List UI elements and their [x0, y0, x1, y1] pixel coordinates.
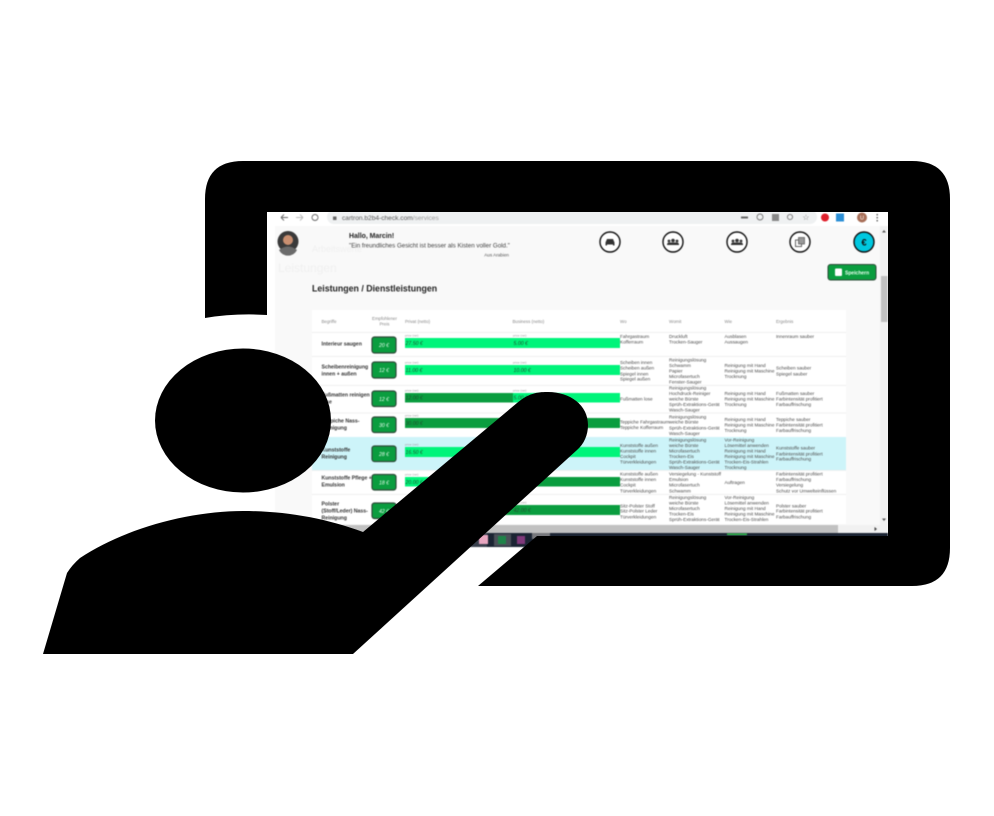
column: Wo: Türverkleidungen	[620, 459, 657, 464]
column: Womit: Wasch-Sauger	[669, 465, 700, 470]
table header: Wo	[620, 319, 627, 324]
row labels: (Stoff/Leder) Nass-	[322, 508, 368, 514]
column: Wie: Aussaugen	[724, 340, 748, 345]
price bars: price (net)	[405, 414, 419, 418]
browser toolbar: ☆	[802, 213, 810, 222]
column: Womit: Microfasertuch	[669, 483, 700, 488]
row labels	[322, 342, 372, 522]
browser toolbar: cartron.b2b4-check.com/services	[342, 215, 439, 222]
column: Wie: Ausblasen	[724, 334, 747, 339]
column: Wo: Teppiche Fahrgastraum	[620, 420, 669, 425]
price bars: 11.00 €	[406, 368, 424, 374]
column: Ergebnis: Farbintensität profitiert	[776, 509, 823, 514]
column: Wie: Lösemittel anwenden	[724, 443, 769, 448]
column: Wo: Fahrgastraum	[620, 334, 649, 339]
column: Ergebnis: Farbauffrischung	[776, 514, 811, 519]
avatar	[278, 231, 298, 256]
price bars: 20.00 €	[404, 480, 424, 486]
table header: Privat (netto)	[405, 319, 431, 324]
row labels: Reinigung	[322, 426, 347, 432]
column: Womit: Reinigungslösung	[669, 358, 707, 363]
column: Ergebnis: Fußmatten sauber	[776, 391, 815, 396]
price bars: 30.00 €	[406, 421, 424, 427]
column: Wie: Reinigung mit Maschine	[724, 396, 775, 401]
column: Wie: Vor-Reinigung	[724, 438, 755, 443]
row labels: Kunststoffe Pflege +	[322, 476, 372, 482]
column: Womit: Wasch-Sauger	[669, 407, 700, 412]
table header: Ergebnis	[776, 319, 794, 324]
column: Wie: Reinigung mit Hand	[724, 448, 766, 453]
column: Ergebnis: Farbauffrischung	[776, 402, 811, 407]
column: Wo: Teppiche Kofferraum	[620, 425, 663, 430]
column: Wie: Lösemittel anwenden	[724, 501, 769, 506]
column: Womit: Reinigungslösung	[669, 495, 707, 500]
column: Wo	[620, 334, 669, 519]
scrollbars	[267, 226, 888, 533]
save button	[828, 264, 876, 280]
recommended price badges: 28 €	[378, 452, 390, 458]
price bars: 42.00 €	[514, 508, 532, 514]
column: Womit: Emulsion	[669, 477, 689, 482]
column: Ergebnis: Farbauffrischung	[776, 477, 811, 482]
highlighted row	[312, 437, 846, 470]
recommended price badges: 30 €	[379, 423, 390, 429]
services table	[312, 310, 846, 524]
save button: Speichern	[845, 270, 869, 276]
column: Wo: Kunststoffe innen	[620, 448, 657, 453]
recommended price badges	[372, 337, 396, 518]
column: Womit: Microfasertuch	[669, 506, 700, 511]
column: Wie: Trocknung	[724, 402, 747, 407]
column: Womit: Sprüh-Extraktions-Gerät	[669, 402, 720, 407]
price bars	[404, 334, 620, 515]
recommended price badges: 18 €	[379, 480, 390, 486]
column: Wo: Spiegel innen	[620, 371, 649, 376]
column: Womit: Sprüh-Extraktions-Gerät	[669, 425, 720, 430]
faded background headings: Arbeitswerte	[312, 244, 362, 254]
column: Wie: Auftragen	[724, 480, 745, 485]
greeting: "Ein freundliches Gesicht ist besser als Kisten voller Gold."	[349, 242, 510, 250]
icon: documents	[790, 232, 810, 252]
price bars: 16.50 €	[406, 450, 424, 456]
column: Wie: Reinigung mit Maschine	[724, 511, 775, 516]
column: Wo: Scheiben außen	[620, 366, 655, 371]
column: Wie: Reinigung mit Maschine	[724, 369, 775, 374]
column: Womit: weiche Bürste	[669, 420, 699, 425]
column: Womit: Trocken-Eis	[669, 454, 694, 459]
column: Ergebnis: Schutz vor Umwelteinflüssen	[776, 488, 837, 493]
table header: Womit	[669, 319, 682, 324]
price bars: 12.00 €	[406, 396, 424, 402]
tablet frame	[205, 161, 950, 586]
row labels: Reinigung	[322, 454, 347, 460]
column: Wie: Vor-Reinigung	[724, 495, 755, 500]
column: Ergebnis	[776, 334, 837, 519]
row labels: Emulsion	[322, 482, 345, 488]
browser toolbar: U	[860, 216, 864, 222]
column: Wie: Reinigung mit Hand	[724, 363, 766, 368]
price bars: price (net)	[513, 360, 527, 364]
table header: Preis	[379, 322, 390, 326]
column: Womit: Hochdruck-Reiniger	[669, 391, 711, 396]
column: Ergebnis: Farbintensität profitiert	[776, 472, 823, 477]
column: Wo: Kunststoffe außen	[620, 443, 658, 448]
column: Womit: Versiegelung - Kunststoff	[669, 472, 722, 477]
column: Wie	[724, 334, 775, 522]
column: Wie: Reinigung mit Maschine	[724, 454, 775, 459]
column: Wie: Reinigung mit Hand	[724, 506, 766, 511]
column: Womit: Trocken-Sauger	[669, 340, 703, 345]
column: Wo: Fußmatten lose	[620, 396, 653, 401]
column: Ergebnis: Scheiben sauber	[776, 366, 812, 371]
column: Wo: Cockpit	[620, 454, 636, 459]
column: Wie: Reinigung mit Hand	[724, 391, 766, 396]
column: Ergebnis: Kunststoffe sauber	[776, 446, 815, 451]
price bars: price (net)	[405, 442, 419, 446]
column: Womit: weiche Bürste	[669, 501, 699, 506]
table header	[322, 316, 794, 326]
greeting: Hallo, Marcin!	[349, 233, 394, 240]
windows taskbar	[440, 533, 888, 547]
column: Womit: Schwamm	[669, 363, 691, 368]
column: Ergebnis: Farbauffrischung	[776, 428, 811, 433]
column: Wo: Kunststoffe außen	[620, 472, 658, 477]
column: Wo: Sitz-Polster Stoff	[620, 503, 656, 508]
column: Womit: Reinigungslösung	[669, 385, 707, 390]
column: Womit: Sprüh-Extraktions-Gerät	[669, 459, 720, 464]
price bars: price (net)	[405, 360, 419, 364]
price bars: price (net)	[405, 388, 419, 392]
column: Ergebnis: Innenraum sauber	[776, 334, 814, 339]
row labels: Kunststoffe	[322, 448, 350, 454]
column: Womit: Wasch-Sauger	[669, 431, 700, 436]
column: Wo: Kunststoffe innen	[620, 477, 657, 482]
column: Wo: Türverkleidungen	[620, 514, 657, 519]
table header: Business (netto)	[512, 319, 545, 324]
recommended price badges: 42 €	[379, 509, 390, 515]
column: Womit: Druckluft	[669, 334, 688, 339]
column: Ergebnis: Farbintensität profitiert	[776, 451, 823, 456]
table header: Wie	[724, 319, 733, 324]
row labels: Reinigung	[322, 516, 347, 522]
column: Wo: Scheiben innen	[620, 360, 653, 365]
column: Wie: Trocknung	[724, 465, 747, 470]
column: Wo: Sitz-Polster Leder	[620, 509, 658, 514]
recommended price badges: 12 €	[379, 368, 390, 374]
column: Womit: Schwamm	[669, 488, 691, 493]
icon: team	[727, 232, 747, 252]
column: Wie: Trocknung	[724, 428, 747, 433]
price bars: 5.00 €	[514, 396, 529, 402]
greeting	[349, 233, 510, 258]
column: Wie: Trocken-Eis-Strahlen	[724, 517, 769, 522]
price bars: 5.00 €	[514, 341, 529, 347]
column: Wie: Trocknung	[724, 374, 747, 379]
column: Ergebnis: Farbintensität profitiert	[776, 396, 823, 401]
column: Womit: Sprüh-Extraktions-Gerät	[669, 517, 720, 522]
price bars: 27.50 €	[404, 341, 424, 347]
greeting: Aus Arabien	[484, 252, 509, 258]
column: Wo: Kofferraum	[620, 340, 643, 345]
navigation icons	[600, 232, 874, 252]
column: Womit: Trocken-Eis	[669, 511, 694, 516]
column: Womit: weiche Bürste	[669, 443, 699, 448]
column: Womit: Microfasertuch	[669, 374, 700, 379]
column: Wie: Reinigung mit Hand	[724, 417, 766, 422]
column: Wo: Türverkleidungen	[620, 488, 657, 493]
column: Womit: Microfasertuch	[669, 448, 700, 453]
column: Womit: Reinigungslösung	[669, 414, 707, 419]
price bars: 10.00 €	[514, 368, 532, 374]
column: Ergebnis: Versiegelung	[776, 483, 803, 488]
column: Womit: Papier	[669, 369, 683, 374]
column: Womit: Reinigungslösung	[669, 438, 707, 443]
icon: customers	[663, 232, 683, 252]
recommended price badges: 12 €	[379, 397, 390, 403]
icon: euro	[854, 232, 874, 252]
column: Wie: Trocken-Eis-Strahlen	[724, 459, 769, 464]
column: Womit	[669, 334, 722, 522]
icon: euro: €	[861, 238, 867, 248]
row labels: Polster	[322, 502, 339, 508]
column: Ergebnis: Polster sauber	[776, 503, 807, 508]
column: Wo: Cockpit	[620, 483, 636, 488]
faded background headings	[278, 244, 362, 275]
person: body and pointing arm	[43, 392, 588, 654]
price bars: price (net)	[405, 472, 419, 476]
column: Ergebnis: Farbauffrischung	[776, 457, 811, 462]
column: Wie: Reinigung mit Maschine	[724, 422, 775, 427]
panel: browser screenshot	[267, 210, 888, 547]
icon: car	[600, 232, 620, 252]
price bars: price (net)	[405, 334, 419, 338]
price bars: price (net)	[513, 388, 527, 392]
table header: Empfohlener	[372, 316, 397, 321]
recommended price badges: 20 €	[378, 343, 390, 349]
price bars: price (net)	[513, 334, 527, 338]
page title: Leistungen / Dienstleistungen	[312, 284, 437, 294]
column: Womit: weiche Bürste	[669, 396, 699, 401]
column: Wo: Spiegel außen	[620, 377, 651, 382]
row labels: lose	[322, 400, 332, 406]
column: Womit: Fenster-Sauger	[669, 380, 702, 385]
person: head	[155, 348, 331, 492]
browser toolbar	[267, 210, 888, 226]
column: Ergebnis: Teppiche sauber	[776, 417, 811, 422]
column: Ergebnis: Spiegel sauber	[776, 371, 808, 376]
row labels: Scheibenreinigung	[322, 364, 368, 370]
row labels: Fußmatten reinigen	[322, 392, 370, 398]
row labels: Teppiche Nass-	[322, 418, 360, 424]
table header: Begriffe	[322, 319, 337, 324]
faded background headings: Leistungen	[278, 261, 337, 275]
row labels: Interieur saugen	[322, 342, 362, 348]
price bars: price (net)	[513, 500, 527, 504]
row labels: innen + außen	[322, 372, 357, 378]
column: Ergebnis: Farbintensität profitiert	[776, 422, 823, 427]
